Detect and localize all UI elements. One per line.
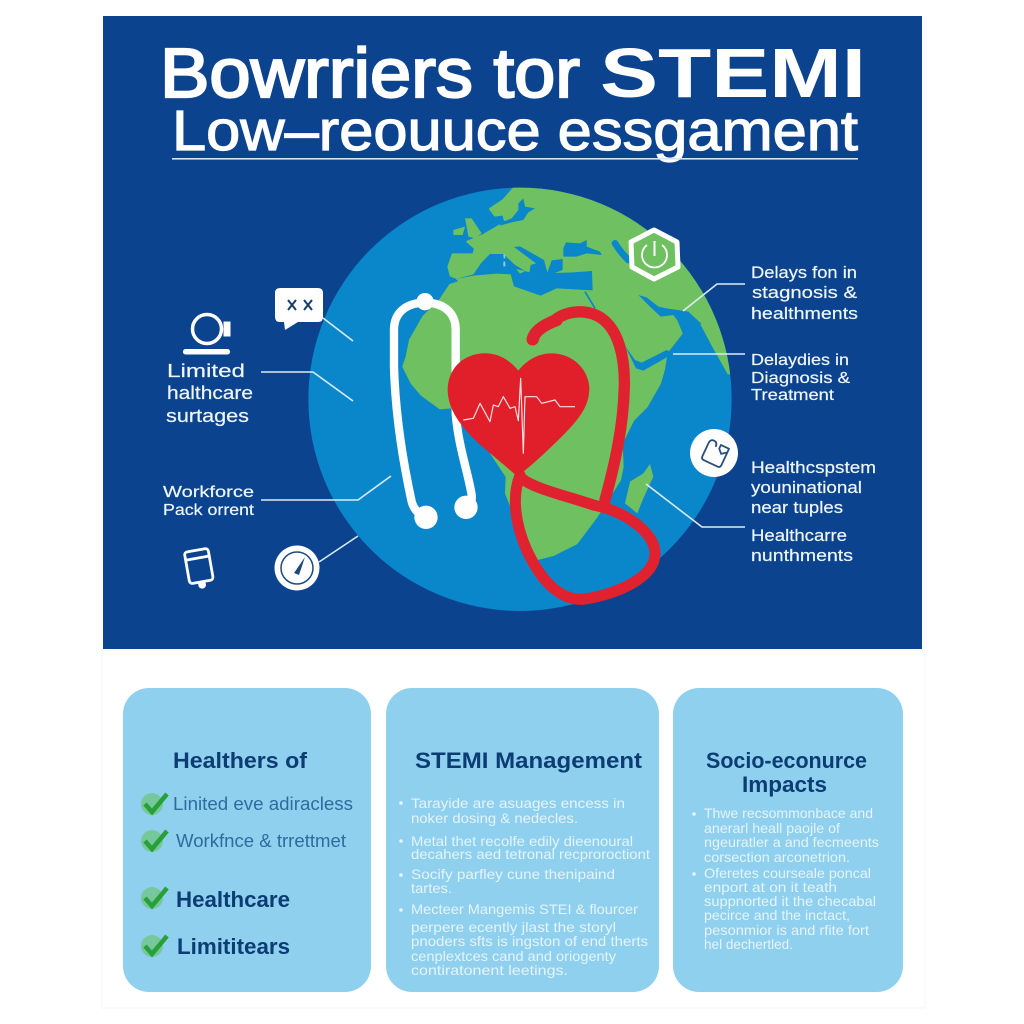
bullet list: hel dechertled.	[704, 936, 793, 952]
label: delays in diagnosis: healthments	[751, 304, 858, 323]
device body	[184, 548, 213, 584]
connector lines	[261, 284, 745, 562]
chest connector	[416, 293, 434, 310]
panel: healthers of	[123, 688, 371, 992]
label: workforce: Workforce	[163, 484, 254, 501]
clipboard disc	[690, 429, 738, 477]
bullet list: enport at on it teath	[704, 879, 837, 895]
bullet list: cenplextces cand and oriogenty	[411, 948, 616, 964]
left ear tip	[414, 506, 438, 529]
card background	[386, 688, 659, 992]
check item 4: Limititears	[177, 934, 290, 959]
card background	[123, 688, 371, 992]
limited healthcare connector	[261, 372, 353, 401]
label: workforce	[163, 484, 255, 519]
Sicily	[516, 269, 525, 274]
title underline	[172, 158, 858, 160]
heart	[448, 353, 589, 477]
label: delaydies in diagnosis and treatment	[751, 352, 850, 404]
bullet list: noker dosing & nedecles.	[411, 810, 578, 826]
Britain	[465, 218, 482, 238]
panel: blue hero	[103, 16, 922, 649]
Black Sea	[563, 240, 602, 257]
tubing	[394, 302, 472, 517]
card heading: Healthers of	[173, 748, 308, 773]
icon: speech bubble	[275, 288, 323, 330]
card heading	[706, 748, 867, 797]
ECG trace	[463, 378, 575, 453]
card heading: Socio-econurce	[706, 748, 867, 773]
white stethoscope	[394, 293, 478, 529]
clipboard glyph	[701, 439, 729, 468]
icon: hexagon power badge	[631, 230, 678, 279]
check item 3: Healthcare	[176, 887, 290, 912]
card background	[673, 688, 903, 992]
title emphasis: STEMI	[600, 34, 866, 112]
workforce connector	[261, 476, 391, 500]
icon: device tag	[184, 548, 214, 589]
label: delays in diagnosis: Delays fon in	[751, 263, 857, 282]
power bar	[654, 241, 656, 256]
bullet list: pecirce and the inctact,	[704, 907, 850, 923]
bullet list: Socify parfley cune thenipaind	[411, 866, 615, 882]
bullet list	[399, 795, 650, 978]
check item 2: Workfnce & trrettmet	[176, 831, 346, 851]
bullet list: Tarayide are asuages encess in	[411, 795, 625, 811]
card heading: STEMI Management	[415, 748, 643, 773]
clipboard left clip	[708, 439, 718, 447]
icon: ring device	[183, 314, 230, 354]
label: limited healthcare: Limited	[167, 361, 245, 381]
label: delays in diagnosis: stagnosis &	[752, 283, 858, 302]
Red Sea and Gulf of Aden	[626, 346, 669, 371]
lower white section	[102, 650, 925, 1008]
panel: stemi management	[386, 688, 659, 992]
bullet list: Thwe recsommonbace and	[704, 805, 873, 821]
label: workforce: Pack orrent	[163, 502, 255, 519]
label: healthcare system: Healthcspstem	[751, 458, 876, 477]
label: delaydies in diagnosis and treatment: Delaydies in	[751, 352, 849, 369]
check item 1: Linited eve adiracless	[173, 794, 353, 814]
label: limited healthcare: surtages	[166, 406, 249, 426]
seas of Europe	[453, 198, 602, 296]
Persian Gulf and Arabian Sea	[638, 295, 702, 324]
badge hexagon	[631, 230, 678, 279]
label: healthcare system	[751, 458, 876, 517]
bullet list: pnoders sfts is ingston of end therts	[411, 933, 648, 949]
Corsica and Sardinia	[503, 254, 505, 266]
delays connector	[683, 284, 745, 311]
label: delays in diagnosis	[751, 263, 858, 323]
speech bubble connector	[323, 318, 353, 341]
gauge connector	[319, 536, 358, 562]
bullet list: suppnorted it the checabal	[704, 893, 876, 909]
Red Sea north	[585, 292, 595, 308]
label: delaydies in diagnosis and treatment: Treatment	[751, 387, 835, 404]
gauge needle	[294, 557, 305, 575]
clipboard right clip	[718, 445, 729, 456]
bullet list: Oferetes courseale poncal	[704, 865, 871, 881]
bullet list: perpere ecently jlast the storyl	[411, 919, 616, 935]
gauge face	[274, 546, 320, 590]
title line 2: Low–reouuce essgament	[172, 99, 858, 163]
lower loop	[515, 475, 655, 599]
bullet list: Metal thet recolfe edily dieenoural	[411, 833, 633, 849]
title	[160, 34, 866, 163]
gauge ring	[281, 552, 313, 584]
Baltic Sea	[499, 198, 535, 226]
bubble	[275, 288, 323, 330]
Madagascar	[625, 464, 653, 513]
device top bar	[186, 556, 209, 560]
bullet list: anerarl heall paojle of	[704, 820, 840, 836]
device tail	[199, 582, 205, 588]
label: limited healthcare	[166, 361, 253, 426]
healthcare nutrients connector	[646, 484, 745, 527]
bullet list: tartes.	[411, 880, 452, 896]
Mediterranean sea	[456, 246, 593, 296]
label: healthcare nunthments: Healthcarre	[751, 526, 847, 545]
label: limited healthcare: halthcare	[167, 383, 253, 403]
red stethoscope	[515, 312, 655, 599]
label: healthcare nunthments	[751, 526, 853, 565]
power ring	[642, 245, 667, 267]
clipboard sheet	[701, 444, 727, 468]
icon: clipboard	[690, 429, 738, 477]
panel: socio-economic impacts	[673, 688, 903, 992]
label: healthcare system: near tuples	[751, 498, 843, 517]
ring	[192, 314, 222, 344]
label: delaydies in diagnosis and treatment: Diagnosis &	[751, 370, 850, 387]
title line 1: Bowrriers tor	[160, 34, 580, 112]
crosses	[288, 300, 312, 310]
label: healthcare nunthments: nunthments	[751, 546, 853, 565]
Ireland	[453, 227, 465, 235]
ocean	[308, 188, 732, 611]
base	[183, 349, 230, 354]
globe	[308, 188, 732, 611]
bullet list: pesonmior is and rfite fort	[704, 922, 869, 938]
diagnosis connector	[673, 353, 745, 355]
right ear tip	[454, 496, 478, 519]
continents	[402, 188, 730, 560]
bullet list: ngeuratler a and fecmeents	[704, 834, 879, 850]
upper tube	[555, 312, 624, 500]
icon: gauge	[274, 546, 320, 590]
knob	[224, 322, 230, 336]
bullet list: contiratonent leetings.	[411, 962, 568, 978]
bullet list	[692, 805, 879, 952]
bullet list: Mecteer Mangemis STEI & flourcer	[411, 901, 638, 917]
tube tip	[533, 320, 557, 339]
Africa and Eurasia landmass	[402, 188, 730, 560]
bullet list: corsection arconetrion.	[704, 849, 850, 865]
Caspian Sea	[615, 243, 628, 260]
card heading: Impacts	[742, 772, 827, 797]
bullet list: decahers aed tetronal recproroctiont	[411, 846, 650, 862]
label: healthcare system: youninational	[751, 478, 862, 497]
